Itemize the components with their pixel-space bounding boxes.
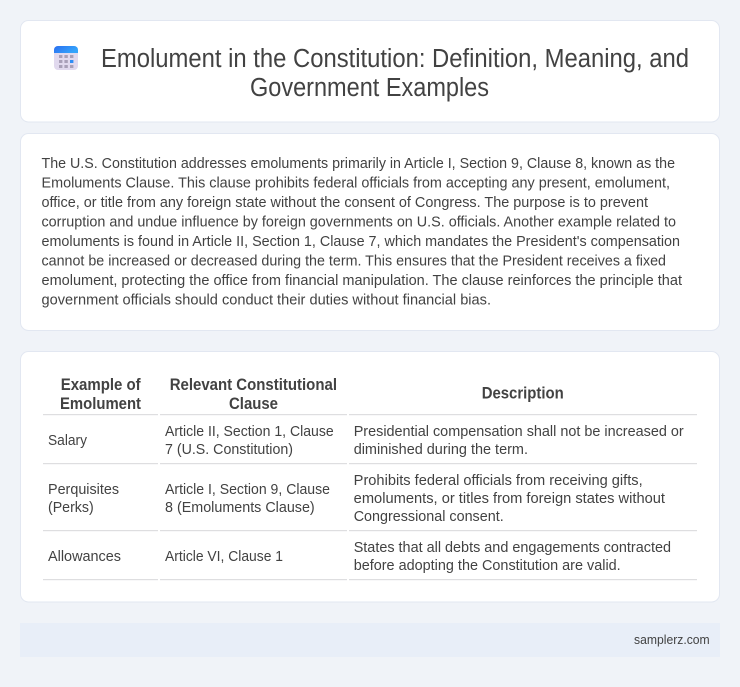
table row: allowances: Allowances <box>48 549 121 565</box>
table row: salary: Presidential compensation shall not be increased or <box>354 424 684 440</box>
table row: perquisites: Prohibits federal officials from receiving gifts, <box>354 473 643 489</box>
table row: salary: 7 (U.S. Constitution) <box>165 442 293 458</box>
table header row: Description <box>482 384 564 402</box>
text block: emoluments clause explanation: corruption and undue influence by foreign governments on U.S. officials. Another example related to <box>42 214 676 230</box>
footer bar <box>20 623 720 657</box>
panel: intro paragraph <box>20 134 720 330</box>
table row: salary <box>48 424 684 458</box>
text block: emoluments clause explanation <box>42 156 682 308</box>
text block: emoluments clause explanation: emoluments is found in Article II, Section 1, Clause 7, which mandates the President's compensation <box>42 234 680 250</box>
title: Emolument in the Constitution: Definition, Meaning, and <box>101 43 689 73</box>
table row: perquisites: emoluments, or titles from foreign states without <box>354 491 665 507</box>
table row: allowances: before adopting the Constitution are valid. <box>354 558 621 574</box>
text block: emoluments clause explanation: The U.S. Constitution addresses emoluments primarily in Article I, Section 9, Clause 8, known as the <box>42 156 675 172</box>
table header row: Clause <box>229 395 278 413</box>
title: Government Examples <box>250 72 489 102</box>
text block: emoluments clause explanation: office, or title from any foreign state without the consent of Congress. The purpose is to prevent <box>42 195 648 211</box>
text block: emoluments clause explanation: cannot be increased or decreased during the term. This ensures that the President receives a fixed <box>42 254 666 270</box>
panel: examples table <box>20 352 720 602</box>
text block: emoluments clause explanation: government officials should conduct their duties without financial bias. <box>42 292 491 308</box>
table row: perquisites <box>48 473 665 525</box>
table header row: Relevant Constitutional <box>170 376 337 394</box>
table row: salary: diminished during the term. <box>354 442 528 458</box>
table row: perquisites: Perquisites <box>48 482 119 498</box>
table row: allowances: Article VI, Clause 1 <box>165 549 283 565</box>
table row: salary: Salary <box>48 433 88 449</box>
table row: perquisites: Article I, Section 9, Clause <box>165 482 330 498</box>
icon: calendar <box>54 46 78 70</box>
table row: allowances: States that all debts and engagements contracted <box>354 540 671 556</box>
panel: title header <box>20 20 720 122</box>
table row: salary: Article II, Section 1, Clause <box>165 424 334 440</box>
title <box>101 43 689 102</box>
table row: perquisites: (Perks) <box>48 500 94 516</box>
table header row <box>60 376 564 413</box>
table header row: Example of <box>61 376 141 394</box>
table row: allowances <box>48 540 671 574</box>
footer source text: samplerz.com <box>634 632 710 647</box>
text block: emoluments clause explanation: emolument, protecting the office from financial manipulation. The clause reinforces the principle that <box>42 273 682 289</box>
table row: perquisites: Congressional consent. <box>354 509 504 525</box>
table header row: Emolument <box>60 395 142 413</box>
table row: perquisites: 8 (Emoluments Clause) <box>165 500 315 516</box>
text block: emoluments clause explanation: Emoluments Clause. This clause prohibits federal officials from accepting any present, emolument, <box>42 176 670 192</box>
